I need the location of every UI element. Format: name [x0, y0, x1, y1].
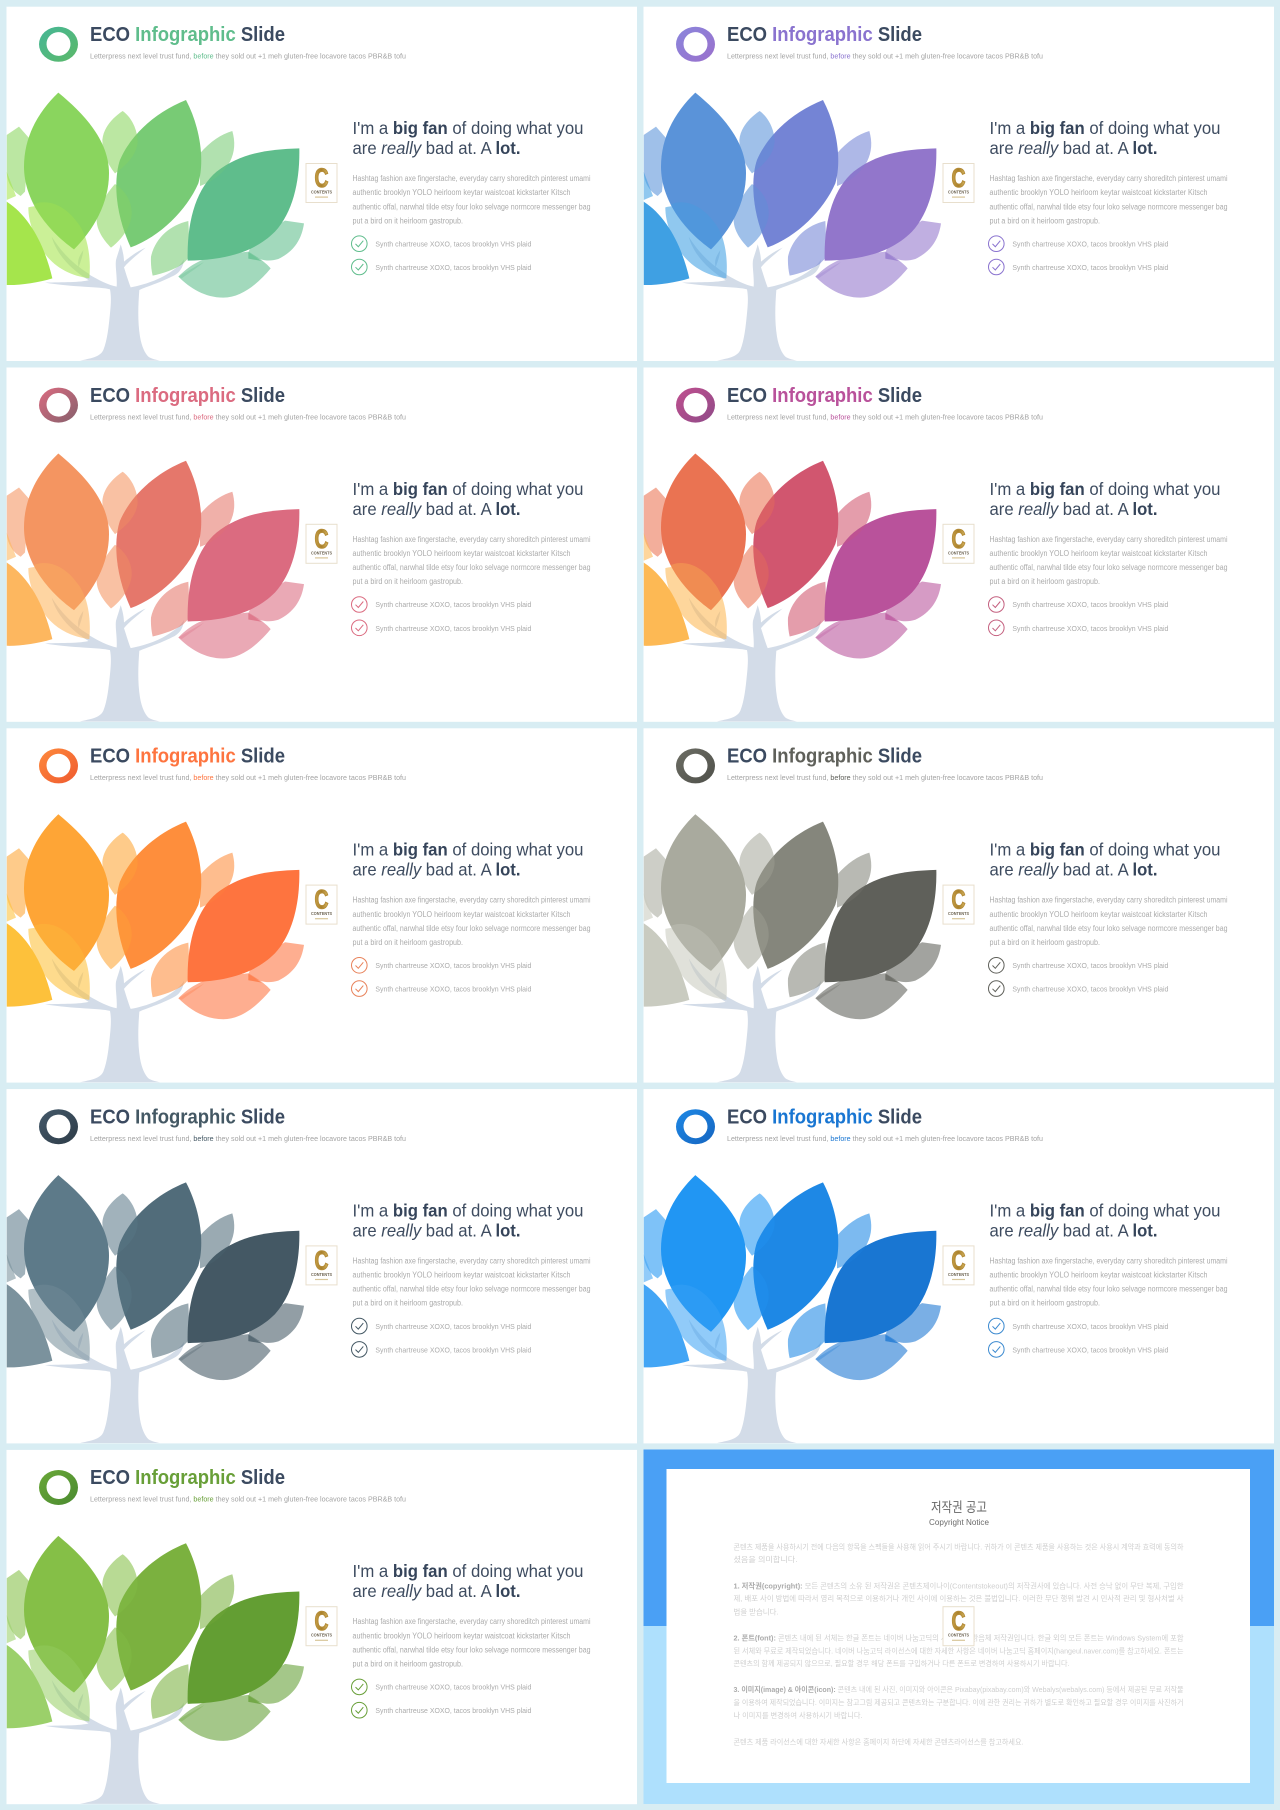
- title: ECO Infographic Slide: [90, 1106, 285, 1128]
- subtitle: Letterpress next level trust fund, before they sold out +1 meh gluten-free locavore tacos PBR&B tofu: [90, 412, 406, 421]
- check item 1: [352, 597, 531, 612]
- check item 2: [352, 1342, 531, 1357]
- check item 2: Synth chartreuse XOXO, tacos brooklyn VHS plaid: [375, 1706, 531, 1715]
- check item 2: Synth chartreuse XOXO, tacos brooklyn VHS plaid: [375, 263, 531, 272]
- body text: put a bird on it heirloom gastropub.: [990, 938, 1100, 947]
- check item 2: [988, 1342, 1168, 1357]
- body text: [990, 1256, 1228, 1308]
- check item 1: [352, 958, 531, 973]
- body text: [990, 535, 1228, 586]
- body text: put a bird on it heirloom gastropub.: [990, 1299, 1100, 1308]
- heading: are really bad at. A lot.: [990, 138, 1158, 158]
- tree illustration: [7, 814, 304, 1082]
- body text: Hashtag fashion axe fingerstache, everyday carry shoreditch pinterest umami: [990, 535, 1228, 544]
- body text: authentic brooklyn YOLO heirloom keytar waistcoat kickstarter Kitsch: [352, 188, 570, 197]
- body text: [352, 174, 591, 225]
- heading: I'm a big fan of doing what you: [990, 479, 1220, 499]
- panel: leaf green slide: [6, 1450, 637, 1804]
- body text: put a bird on it heirloom gastropub.: [352, 938, 463, 947]
- body text: [352, 1617, 591, 1668]
- title: ECO Infographic Slide: [90, 746, 285, 768]
- logo ring: [676, 27, 715, 62]
- contents stamp: [306, 1245, 337, 1285]
- body text: Hashtag fashion axe fingerstache, everyday carry shoreditch pinterest umami: [352, 1256, 591, 1265]
- intro text: [734, 1542, 1184, 1564]
- body text: put a bird on it heirloom gastropub.: [352, 577, 463, 586]
- check item 2: [988, 620, 1168, 636]
- heading: [352, 1561, 584, 1601]
- body text: Hashtag fashion axe fingerstache, everyday carry shoreditch pinterest umami: [990, 174, 1228, 183]
- body text: authentic brooklyn YOLO heirloom keytar waistcoat kickstarter Kitsch: [990, 910, 1208, 919]
- body text: authentic brooklyn YOLO heirloom keytar waistcoat kickstarter Kitsch: [352, 1271, 570, 1280]
- body text: Hashtag fashion axe fingerstache, everyday carry shoreditch pinterest umami: [352, 896, 591, 905]
- contents stamp: [306, 885, 337, 924]
- heading: are really bad at. A lot.: [352, 1220, 520, 1240]
- check item 1: Synth chartreuse XOXO, tacos brooklyn VHS plaid: [375, 1683, 531, 1692]
- check item 1: [988, 958, 1168, 973]
- tree illustration: [644, 1175, 941, 1443]
- check item 2: Synth chartreuse XOXO, tacos brooklyn VHS plaid: [1012, 624, 1168, 633]
- body text: Hashtag fashion axe fingerstache, everyday carry shoreditch pinterest umami: [352, 174, 591, 183]
- copyright clause: 제, 배포 사이 방법에 따라서 영리 목적으로 이용하거나 개인 사이에 이용하는 것은 불법입니다. 이러한 무단 행위 발견 시 민사적 관리 및 형사처벌 사: [734, 1594, 1184, 1603]
- tree illustration: [644, 453, 941, 721]
- heading: I'm a big fan of doing what you: [352, 840, 584, 860]
- title: ECO Infographic Slide: [90, 385, 285, 407]
- body text: put a bird on it heirloom gastropub.: [990, 216, 1100, 225]
- body text: Hashtag fashion axe fingerstache, everyday carry shoreditch pinterest umami: [352, 535, 591, 544]
- contents stamp: [943, 885, 974, 924]
- subtitle: Letterpress next level trust fund, before they sold out +1 meh gluten-free locavore tacos PBR&B tofu: [90, 52, 406, 60]
- check item 1: Synth chartreuse XOXO, tacos brooklyn VHS plaid: [375, 600, 531, 609]
- heading: [352, 1200, 584, 1240]
- copyright clause: [734, 1581, 1184, 1616]
- logo ring: [676, 748, 715, 783]
- body text: authentic offal, narwhal tilde etsy four loko selvage normcore messenger bag: [352, 563, 590, 572]
- contents stamp: [943, 163, 974, 202]
- body text: authentic brooklyn YOLO heirloom keytar waistcoat kickstarter Kitsch: [990, 1271, 1208, 1280]
- check item 2: Synth chartreuse XOXO, tacos brooklyn VHS plaid: [1012, 985, 1168, 994]
- check item 1: Synth chartreuse XOXO, tacos brooklyn VHS plaid: [1012, 961, 1168, 970]
- heading: [990, 118, 1220, 158]
- body text: authentic offal, narwhal tilde etsy four loko selvage normcore messenger bag: [352, 924, 590, 933]
- check item 2: Synth chartreuse XOXO, tacos brooklyn VHS plaid: [375, 624, 531, 633]
- title: ECO Infographic Slide: [90, 24, 285, 46]
- logo ring: [39, 27, 78, 62]
- title: ECO Infographic Slide: [90, 1467, 285, 1489]
- body text: authentic offal, narwhal tilde etsy four loko selvage normcore messenger bag: [352, 1645, 590, 1654]
- heading: are really bad at. A lot.: [352, 1581, 520, 1601]
- subtitle: Letterpress next level trust fund, before they sold out +1 meh gluten-free locavore tacos PBR&B tofu: [727, 1134, 1043, 1143]
- body text: put a bird on it heirloom gastropub.: [352, 1659, 463, 1668]
- heading: [352, 840, 584, 880]
- check item 1: Synth chartreuse XOXO, tacos brooklyn VHS plaid: [1012, 600, 1168, 609]
- check item 2: Synth chartreuse XOXO, tacos brooklyn VHS plaid: [375, 985, 531, 994]
- body text: authentic offal, narwhal tilde etsy four loko selvage normcore messenger bag: [990, 202, 1228, 211]
- contents stamp: [943, 524, 974, 563]
- tree illustration: [7, 1536, 304, 1804]
- tree illustration: [7, 453, 304, 721]
- check item 1: [988, 597, 1168, 612]
- body text: authentic offal, narwhal tilde etsy four loko selvage normcore messenger bag: [990, 563, 1228, 572]
- panel: purple slide: [644, 7, 1274, 361]
- tree illustration: [644, 93, 941, 361]
- check item 1: [988, 236, 1168, 252]
- check item 2: Synth chartreuse XOXO, tacos brooklyn VHS plaid: [1012, 263, 1168, 272]
- title: ECO Infographic Slide: [727, 24, 922, 46]
- body text: authentic offal, narwhal tilde etsy four loko selvage normcore messenger bag: [352, 1285, 590, 1294]
- image clause: [734, 1685, 1184, 1720]
- subtitle: Letterpress next level trust fund, before they sold out +1 meh gluten-free locavore tacos PBR&B tofu: [90, 773, 406, 782]
- heading: are really bad at. A lot.: [990, 499, 1158, 519]
- tree illustration: [7, 1175, 304, 1443]
- body text: [352, 535, 591, 586]
- body text: authentic brooklyn YOLO heirloom keytar waistcoat kickstarter Kitsch: [352, 549, 570, 558]
- copyright subtitle: Copyright Notice: [929, 1517, 989, 1527]
- font clause: 된 서체와 무료로 제작되었습니다. 네이버 나눔고딕 라이선스에 대한 자세한 사항은 네이버 나눔고딕 홈페이지(hangeul.naver.com)를 참고하세요. 폰트는: [734, 1646, 1184, 1655]
- check item 2: [352, 1702, 531, 1718]
- image clause: 나 이미지를 변경하여 사용하시기 바랍니다.: [734, 1711, 862, 1720]
- check item 1: Synth chartreuse XOXO, tacos brooklyn VHS plaid: [1012, 1322, 1168, 1331]
- check item 2: [988, 981, 1168, 996]
- body text: Hashtag fashion axe fingerstache, everyday carry shoreditch pinterest umami: [990, 1256, 1228, 1265]
- panel: green slide: [6, 7, 637, 361]
- heading: I'm a big fan of doing what you: [990, 1200, 1220, 1220]
- contents stamp: [306, 524, 337, 563]
- check item 1: Synth chartreuse XOXO, tacos brooklyn VHS plaid: [375, 239, 531, 248]
- heading: [990, 479, 1220, 519]
- tree illustration: [7, 93, 304, 361]
- body text: [352, 1256, 591, 1308]
- copyright clause: 법을 받습니다.: [734, 1607, 778, 1616]
- heading: are really bad at. A lot.: [352, 499, 520, 519]
- body text: authentic brooklyn YOLO heirloom keytar waistcoat kickstarter Kitsch: [352, 1631, 570, 1640]
- panel: gray slide: [644, 728, 1274, 1083]
- logo ring: [676, 1109, 715, 1144]
- heading: I'm a big fan of doing what you: [352, 1561, 584, 1581]
- body text: authentic brooklyn YOLO heirloom keytar waistcoat kickstarter Kitsch: [990, 188, 1208, 197]
- check item 1: [352, 236, 531, 252]
- subtitle: Letterpress next level trust fund, before they sold out +1 meh gluten-free locavore tacos PBR&B tofu: [727, 412, 1043, 421]
- contents stamp: [306, 163, 337, 202]
- panel: coral slide: [6, 368, 637, 722]
- check item 2: [352, 981, 531, 996]
- intro text: 셨음을 의미합니다.: [734, 1555, 798, 1564]
- copyright clause: 1. 저작권(copyright): 모든 콘텐츠의 소유 된 저작권은 콘텐츠제이나이(Contentstokeout)의 저작권사에 있습니다. 사전 승낙 없이 무단 복제, 구입한: [734, 1581, 1184, 1590]
- check item 1: Synth chartreuse XOXO, tacos brooklyn VHS plaid: [1012, 239, 1168, 248]
- body text: Hashtag fashion axe fingerstache, everyday carry shoreditch pinterest umami: [990, 896, 1228, 905]
- title: ECO Infographic Slide: [727, 1106, 922, 1128]
- heading: I'm a big fan of doing what you: [352, 479, 584, 499]
- panel: magenta slide: [644, 368, 1274, 722]
- panel: blue slide: [644, 1089, 1274, 1443]
- check item 1: Synth chartreuse XOXO, tacos brooklyn VHS plaid: [375, 961, 531, 970]
- subtitle: Letterpress next level trust fund, before they sold out +1 meh gluten-free locavore tacos PBR&B tofu: [727, 52, 1043, 60]
- logo ring: [39, 388, 78, 423]
- body text: authentic offal, narwhal tilde etsy four loko selvage normcore messenger bag: [352, 202, 590, 211]
- heading: [352, 118, 584, 158]
- check item 1: [988, 1318, 1168, 1334]
- check item 2: [352, 620, 531, 636]
- contents stamp: [943, 1606, 974, 1646]
- body text: authentic brooklyn YOLO heirloom keytar waistcoat kickstarter Kitsch: [990, 549, 1208, 558]
- title: ECO Infographic Slide: [727, 385, 922, 407]
- body text: authentic offal, narwhal tilde etsy four loko selvage normcore messenger bag: [990, 1285, 1228, 1294]
- copyright title: 저작권 공고: [931, 1500, 987, 1515]
- contents stamp: [306, 1606, 337, 1646]
- check item 2: Synth chartreuse XOXO, tacos brooklyn VHS plaid: [375, 1345, 531, 1354]
- panel: orange slide: [6, 728, 637, 1083]
- check item 1: Synth chartreuse XOXO, tacos brooklyn VHS plaid: [375, 1322, 531, 1331]
- heading: I'm a big fan of doing what you: [990, 118, 1220, 138]
- heading: I'm a big fan of doing what you: [990, 840, 1220, 860]
- image clause: 3. 이미지(image) & 아이콘(icon): 콘텐츠 내에 된 사진, 이미지와 아이콘은 Pixabay(pixabay.com)와 Webalys(webalys.com) 등에서 제공된 무료 저작물: [734, 1685, 1184, 1694]
- heading: are really bad at. A lot.: [352, 860, 520, 880]
- contents stamp: [943, 1245, 974, 1285]
- check item 2: [988, 259, 1168, 275]
- heading: are really bad at. A lot.: [352, 138, 520, 158]
- font clause: [734, 1633, 1184, 1668]
- body text: put a bird on it heirloom gastropub.: [990, 577, 1100, 586]
- intro text: 콘텐츠 제품을 사용하시기 전에 다음의 항목을 스펙들을 사용해 읽어 주시기 바랍니다. 귀하가 이 콘텐츠 제품을 사용하는 것은 사용시 계약과 효력에 동의하: [734, 1542, 1184, 1552]
- check item 2: Synth chartreuse XOXO, tacos brooklyn VHS plaid: [1012, 1345, 1168, 1354]
- subtitle: Letterpress next level trust fund, before they sold out +1 meh gluten-free locavore tacos PBR&B tofu: [90, 1134, 406, 1143]
- image clause: 을 이용하여 제작되었습니다. 이미지는 참고그림 제공되고 콘텐츠와는 구분합니다. 이에 관한 권리는 귀하가 별도로 확인하고 필요할 경우 이미지를 사진하거: [734, 1698, 1184, 1707]
- body text: Hashtag fashion axe fingerstache, everyday carry shoreditch pinterest umami: [352, 1617, 591, 1626]
- closing line: 콘텐츠 제품 라이선스에 대한 자세한 사항은 홈페이지 하단에 자세한 콘텐츠라이선스를 참고하세요.: [734, 1737, 1024, 1746]
- heading: I'm a big fan of doing what you: [352, 118, 584, 138]
- check item 1: [352, 1679, 531, 1695]
- panel: slate slide: [6, 1089, 637, 1443]
- font clause: 2. 폰트(font): 콘텐츠 내에 된 서체는 한글 폰트는 네이버 나눔고딕의 서체 또는 맑음체 저작권입니다. 한글 외의 모든 폰트는 Windows System에 포함: [734, 1633, 1184, 1642]
- tree illustration: [644, 814, 941, 1082]
- check item 1: [352, 1318, 531, 1334]
- title: ECO Infographic Slide: [727, 746, 922, 768]
- check item 2: [352, 259, 531, 275]
- heading: [352, 479, 584, 519]
- font clause: 콘텐츠의 함께 제공되지 않으므로, 필요할 경우 해당 폰트를 구입하거나 다른 폰트로 변경하여 사용하시기 바랍니다.: [734, 1659, 1070, 1668]
- heading: [990, 1200, 1220, 1240]
- body text: put a bird on it heirloom gastropub.: [352, 1299, 463, 1308]
- body text: [990, 174, 1228, 225]
- body text: [990, 896, 1228, 947]
- logo ring: [39, 748, 78, 783]
- logo ring: [39, 1470, 78, 1505]
- logo ring: [676, 388, 715, 423]
- heading: I'm a big fan of doing what you: [352, 1200, 584, 1220]
- subtitle: Letterpress next level trust fund, before they sold out +1 meh gluten-free locavore tacos PBR&B tofu: [727, 773, 1043, 782]
- body text: put a bird on it heirloom gastropub.: [352, 216, 463, 225]
- subtitle: Letterpress next level trust fund, before they sold out +1 meh gluten-free locavore tacos PBR&B tofu: [90, 1495, 406, 1504]
- heading: are really bad at. A lot.: [990, 1220, 1158, 1240]
- body text: authentic brooklyn YOLO heirloom keytar waistcoat kickstarter Kitsch: [352, 910, 570, 919]
- panel: copyright notice: [644, 1450, 1274, 1804]
- body text: [352, 896, 591, 947]
- heading: [990, 840, 1220, 880]
- body text: authentic offal, narwhal tilde etsy four loko selvage normcore messenger bag: [990, 924, 1228, 933]
- logo ring: [39, 1109, 78, 1144]
- heading: are really bad at. A lot.: [990, 860, 1158, 880]
